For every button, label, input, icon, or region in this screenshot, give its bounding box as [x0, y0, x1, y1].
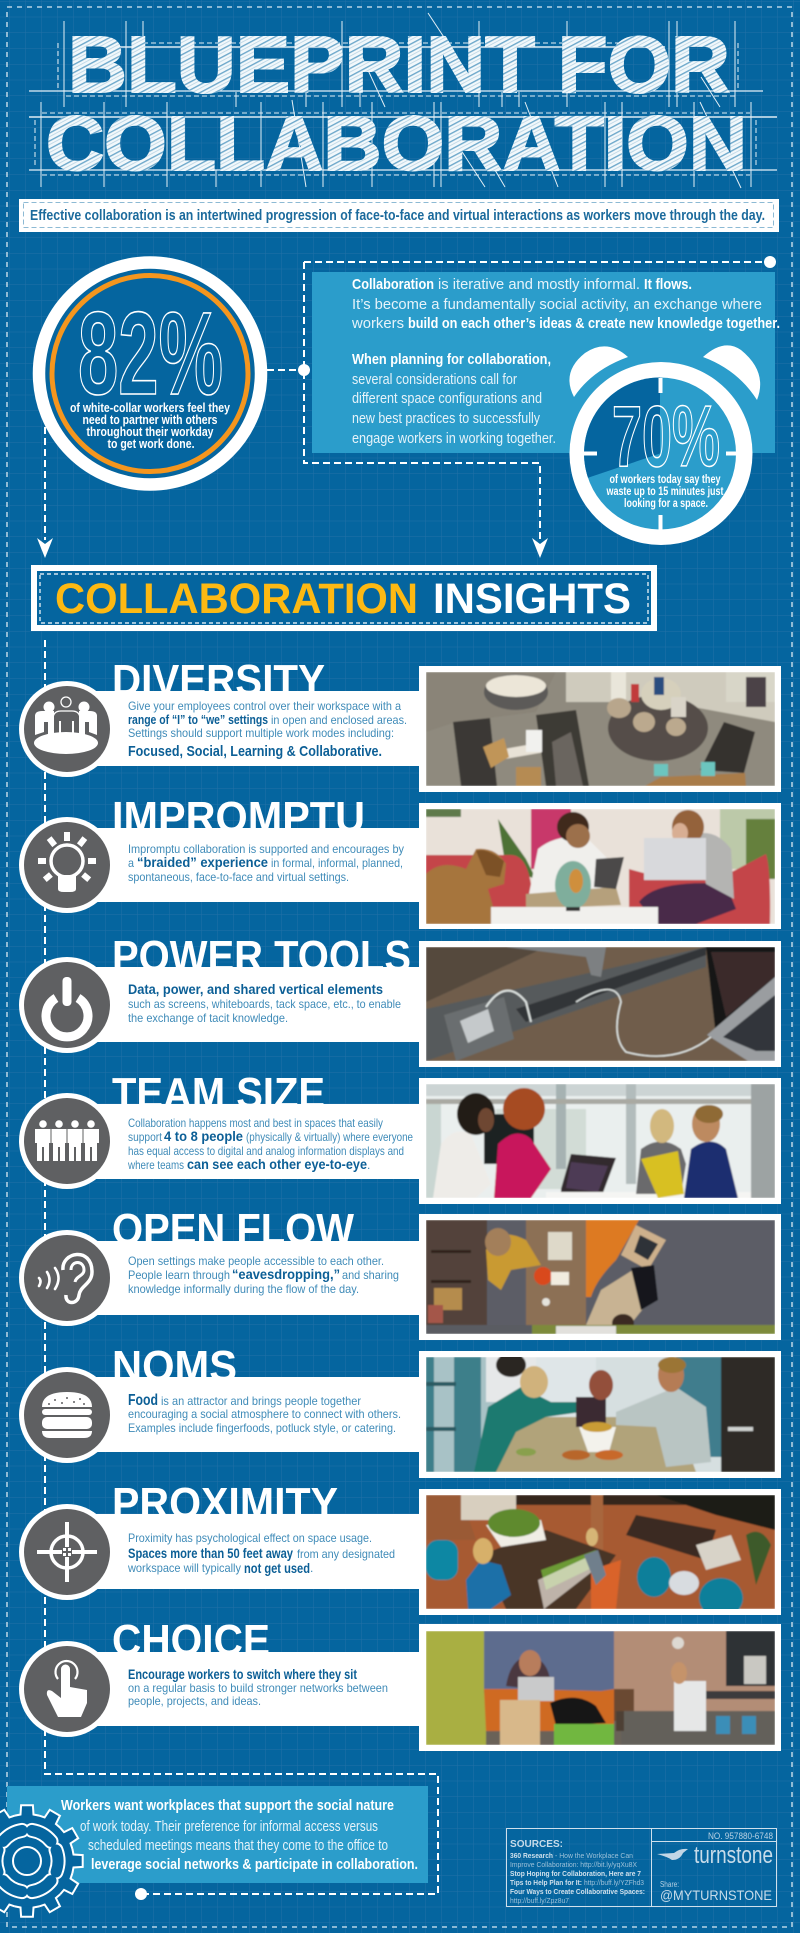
icon: turnstone bird [657, 1849, 688, 1860]
text block: choice [95, 1652, 420, 1726]
heading: team size: TEAM SIZE [112, 1069, 325, 1118]
icon: gear [0, 1805, 83, 1917]
panel: collaboration intro [312, 272, 780, 453]
photo: orange floor workspace [419, 1489, 781, 1618]
text block: open flow: knowledge informally during the flow of the day. [128, 1282, 359, 1296]
text block: proximity: from any designated [297, 1547, 395, 1561]
text block: impromptu: in formal, informal, planned, [271, 856, 403, 870]
panel: choice [19, 1616, 781, 1751]
panel: collaboration intro: engage workers in working together. [352, 430, 556, 447]
text block: impromptu: Impromptu collaboration is supported and encourages by [128, 842, 404, 856]
panel: collaboration intro: different space configurations and [352, 390, 542, 407]
text block: proximity: Proximity has psychological effect on space usage. [128, 1531, 372, 1545]
text block: impromptu: spontaneous, face-to-face and virtual settings. [128, 870, 349, 884]
panel: collaboration intro: It flows. [644, 276, 692, 293]
text block: open flow: Open settings make people accessible to each other. [128, 1254, 384, 1268]
icon: four people [19, 1093, 115, 1189]
panel: 82 percent stat: to get work done. [108, 436, 194, 451]
text block: team size: can see each other eye-to-eye [187, 1156, 367, 1172]
panel: collaboration intro: several considerations call for [352, 371, 517, 388]
logo: turnstone: turnstone [694, 1842, 773, 1869]
heading: collaboration insights: INSIGHTS [433, 575, 631, 623]
text block: open flow: “eavesdropping,” [232, 1266, 340, 1282]
text block: team size: where teams [127, 1158, 184, 1172]
text block: team size [95, 1104, 420, 1179]
panel: power tools [19, 932, 781, 1067]
heading: choice: CHOICE [112, 1616, 270, 1665]
text block: open flow: People learn through [128, 1268, 230, 1282]
heading: proximity: PROXIMITY [112, 1479, 338, 1528]
text block: impromptu: a [128, 856, 134, 870]
text block: open flow [95, 1241, 420, 1315]
panel: collaboration intro: new best practices to successfully [352, 410, 540, 427]
text block: choice: on a regular basis to build stronger networks between [128, 1681, 388, 1695]
panel: 82 percent stat: 82% [78, 288, 223, 420]
photo: sofa with dog [419, 803, 781, 929]
photo: shared food table [419, 1351, 781, 1478]
panel: 70 percent alarm clock: waste up to 15 minutes just [606, 486, 724, 498]
text block: sources: Tips to Help Plan for It: [510, 1878, 582, 1887]
panel: noms [19, 1342, 781, 1478]
text block: diversity: Focused, Social, Learning & Collaborative. [128, 743, 382, 760]
text block: sources: http://buff.ly/Zpz8u7 [510, 1896, 569, 1905]
panel: impromptu [19, 793, 781, 929]
text block: diversity: range of “I” to “we” settings [128, 713, 268, 727]
panel: 82 percent stat: need to partner with others [82, 412, 218, 427]
text block: power tools: Data, power, and shared vertical elements [128, 981, 383, 997]
text block: proximity: . [310, 1561, 313, 1575]
text block: team size: (physically & virtually) where everyone [246, 1130, 413, 1144]
text block: team size: has equal access to digital and analog information displays and [128, 1144, 404, 1158]
text block: sources: Stop Hoping for Collaboration, Here are 7 [510, 1869, 641, 1878]
icon: burger [19, 1367, 115, 1463]
title [29, 13, 777, 188]
text block: sources: http://buff.ly/YZFhd3 [584, 1878, 644, 1887]
heading: power tools: POWER TOOLS [112, 932, 411, 981]
panel: 82 percent stat: of white-collar workers feel they [70, 400, 231, 415]
panel: sources and branding [506, 1828, 776, 1906]
panel: social nature summary [7, 1786, 428, 1883]
panel: proximity [19, 1479, 781, 1618]
panel: collaboration intro: workers [351, 315, 404, 332]
text block: diversity: Settings should support multiple work modes including: [128, 726, 394, 740]
text block: noms: Examples include fingerfoods, potluck style, or catering. [128, 1421, 396, 1435]
text block: choice: people, projects, and ideas. [128, 1694, 261, 1708]
panel: social nature summary: scheduled meetings means that they come to the office to [88, 1838, 388, 1854]
photo: team at laptop [419, 1078, 781, 1204]
text block: noms: Food [128, 1392, 158, 1409]
panel: 70 percent alarm clock: of workers today say they [610, 474, 721, 486]
text block: proximity: Spaces more than 50 feet away [128, 1546, 293, 1561]
tagline banner [19, 199, 779, 232]
text block: noms: encouraging a social atmosphere to connect with others. [128, 1407, 401, 1421]
photo: lounge booth [419, 1624, 781, 1751]
panel: collaboration intro: When planning for collaboration, [352, 351, 551, 368]
heading: noms: NOMS [112, 1342, 237, 1391]
icon: target crosshair [19, 1504, 115, 1600]
text block: choice: Encourage workers to switch where they sit [128, 1666, 357, 1682]
text block: sources: 360 Research [510, 1851, 553, 1860]
icon: meeting table [19, 681, 115, 777]
panel: collaboration intro: is iterative and mostly informal. [438, 276, 640, 293]
icon: pointing hand [19, 1641, 115, 1737]
heading: impromptu: IMPROMPTU [112, 793, 365, 842]
text block: sources [510, 1838, 645, 1905]
panel: 70 percent alarm clock: 70% [612, 389, 720, 485]
text block: team size: 4 to 8 people [164, 1128, 243, 1144]
text: share handle: @MYTURNSTONE [660, 1887, 772, 1903]
text block: impromptu [95, 828, 420, 902]
text block: sources: Improve Collaboration: http://bit.ly/yqXu8X [510, 1860, 637, 1869]
photo: lounge overhead [419, 666, 781, 792]
text block: team size: . [367, 1158, 370, 1172]
panel: diversity [19, 656, 781, 792]
panel: social nature summary: leverage social networks & participate in collaboration. [91, 1856, 418, 1873]
photo: overhead open space [419, 1214, 781, 1340]
panel: open flow [19, 1205, 781, 1340]
text block: diversity [95, 691, 420, 766]
text block: proximity [95, 1514, 420, 1589]
text block: sources: - How the Workplace Can [555, 1851, 633, 1860]
panel: 82 percent stat [39, 262, 261, 484]
text block: sources: Four Ways to Create Collaborative Spaces: [510, 1887, 645, 1896]
panel: 70 percent alarm clock [569, 345, 760, 545]
photo: desk power outlet [419, 941, 781, 1067]
heading: collaboration insights: COLLABORATION [55, 575, 418, 623]
icon: power button [19, 957, 115, 1053]
title: COLLABORATION [46, 101, 747, 187]
text block: proximity: workspace will typically [127, 1561, 241, 1575]
panel: 82 percent stat: throughout their workday [86, 424, 214, 439]
text block: team size: support [128, 1130, 163, 1144]
icon: ear [19, 1230, 115, 1326]
text block: diversity: Give your employees control over their workspace with a [128, 699, 401, 713]
heading: diversity: DIVERSITY [112, 656, 325, 705]
text block: power tools: such as screens, whiteboards, tack space, etc., to enable [128, 997, 401, 1011]
heading: collaboration insights [34, 568, 654, 628]
text block: diversity: in open and enclosed areas. [271, 713, 407, 727]
heading: open flow: OPEN FLOW [112, 1205, 354, 1254]
text block: proximity: not get used [244, 1561, 310, 1576]
text block: noms [95, 1377, 420, 1452]
text: share handle: Share: [660, 1880, 679, 1889]
text block: sources: SOURCES: [510, 1838, 563, 1850]
panel: collaboration intro: It’s become a fundamentally social activity, an exchange where [352, 296, 762, 313]
title: BLUEPRINT FOR [68, 20, 730, 109]
text block: power tools [95, 967, 420, 1042]
text block: noms: is an attractor and brings people together [161, 1394, 361, 1408]
panel: team size [19, 1069, 781, 1204]
panel: social nature summary: of work today. Their preference for informal access versus [80, 1819, 378, 1835]
connector dots and arrowheads [37, 256, 776, 1900]
text block: power tools: the exchange of tacit knowledge. [128, 1011, 288, 1025]
dashed connectors [45, 262, 770, 1894]
text block: impromptu: “braided” experience [137, 854, 268, 870]
panel: collaboration intro: Collaboration [352, 276, 434, 293]
panel: 70 percent alarm clock: looking for a space. [624, 498, 708, 510]
text block: open flow: and sharing [342, 1268, 399, 1282]
text: share handle [660, 1880, 772, 1903]
text: document number: NO. 957880-6748 [708, 1831, 773, 1841]
panel: social nature summary: Workers want workplaces that support the social nature [61, 1797, 394, 1814]
text block: team size: Collaboration happens most and best in spaces that easily [128, 1116, 383, 1130]
icon: lightbulb [19, 817, 115, 913]
